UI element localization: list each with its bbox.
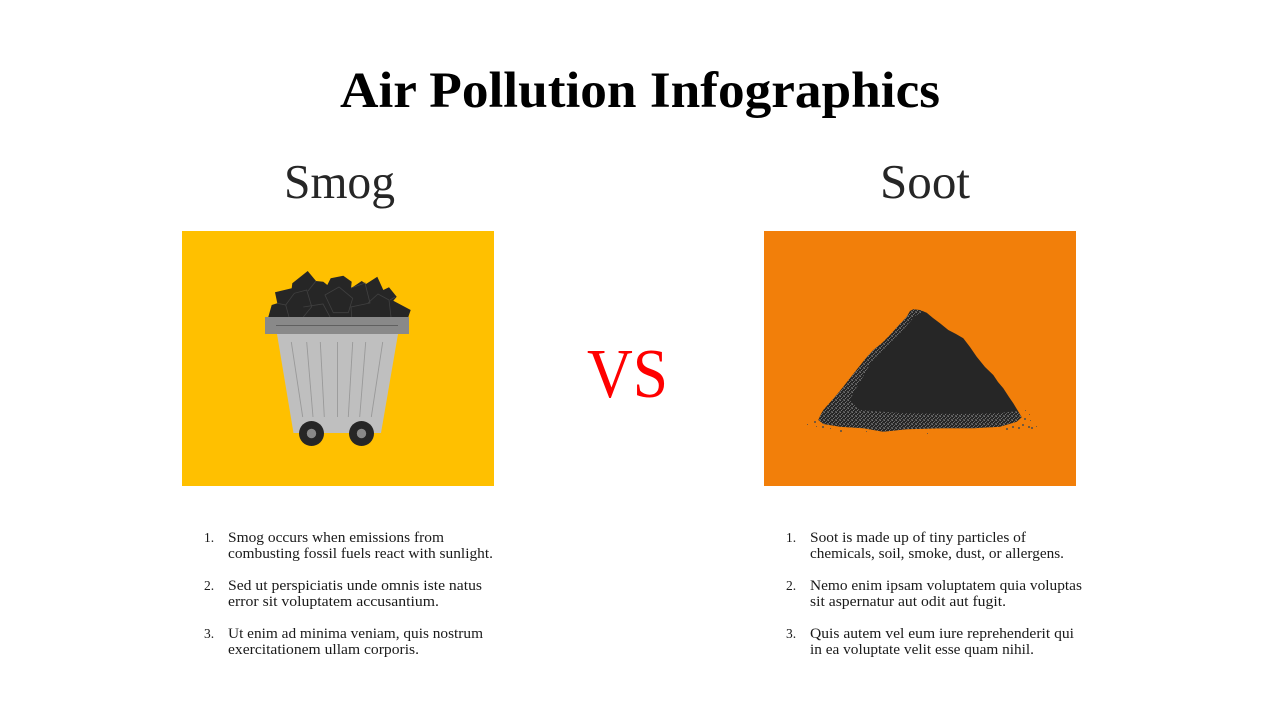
list: smog points	[204, 530, 493, 658]
scattered grains	[807, 410, 1037, 434]
list: soot points: Nemo enim ipsam voluptatem quia voluptas	[810, 578, 1082, 594]
list: soot points: chemicals, soil, smoke, dust, or allergens.	[810, 546, 1064, 562]
panel: soot image	[764, 231, 1076, 486]
wheels	[299, 421, 374, 446]
list: smog points: combusting fossil fuels react with sunlight.	[228, 546, 493, 562]
list: soot points: 3.	[786, 626, 796, 641]
list: soot points: 2.	[786, 578, 796, 593]
panel: smog image	[182, 231, 494, 486]
list: smog points: Smog occurs when emissions from	[228, 530, 445, 546]
title: Air Pollution Infographics	[340, 63, 940, 119]
list: smog points: Ut enim ad minima veniam, quis nostrum	[228, 626, 484, 642]
list: smog points: Sed ut perspiciatis unde omnis iste natus	[228, 578, 482, 594]
heading: Smog: Smog	[284, 154, 395, 209]
stipple texture	[818, 309, 1022, 432]
list: soot points: 1.	[786, 530, 796, 545]
list: soot points: in ea voluptate velit esse quam nihil.	[810, 642, 1034, 658]
list: smog points: 3.	[204, 626, 214, 641]
icon: soot pile	[807, 309, 1037, 434]
heading: Soot: Soot	[880, 154, 970, 209]
icon: coal cart	[265, 271, 411, 446]
cart rim	[265, 317, 409, 334]
list: soot points: sit aspernatur aut odit aut fugit.	[810, 594, 1006, 610]
list: soot points: Quis autem vel eum iure reprehenderit qui	[810, 626, 1074, 642]
list: soot points: Soot is made up of tiny particles of	[810, 530, 1026, 546]
cart body	[277, 334, 398, 433]
cart slats	[291, 342, 383, 417]
list: smog points: error sit voluptatem accusantium.	[228, 594, 439, 610]
list: smog points: exercitationem ullam corporis.	[228, 642, 419, 658]
VS label: VS	[587, 336, 668, 413]
list: smog points: 1.	[204, 530, 214, 545]
list: soot points	[786, 530, 1082, 658]
coal heap	[268, 271, 411, 317]
list: smog points: 2.	[204, 578, 214, 593]
